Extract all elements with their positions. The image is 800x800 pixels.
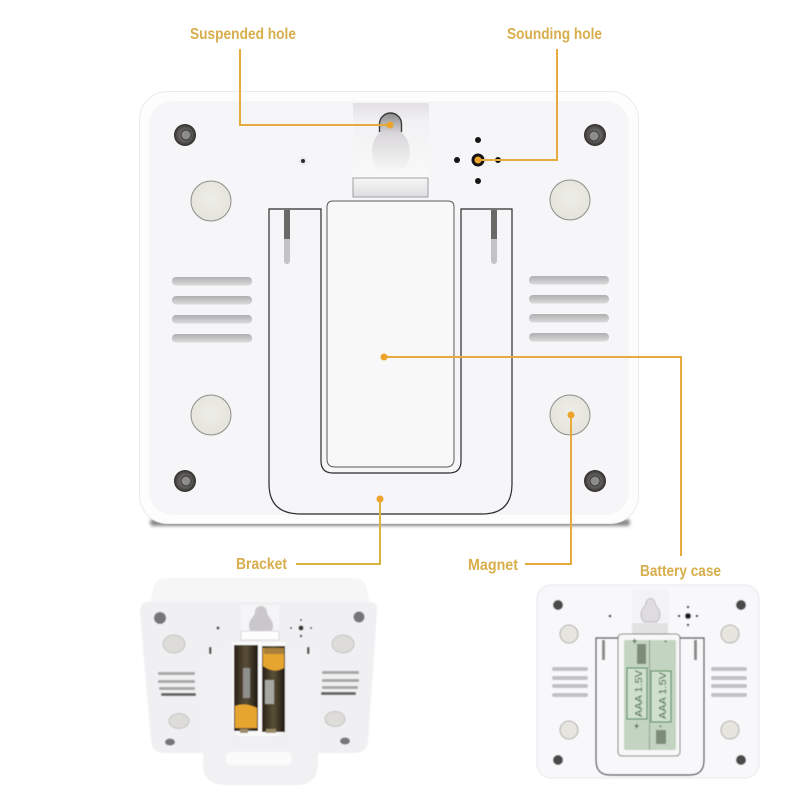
- dot: sounding hole: [474, 156, 482, 164]
- magnets: [560, 625, 739, 739]
- small hole: [609, 615, 611, 617]
- hinge tab: [353, 178, 428, 197]
- hanging recess with keyhole: [353, 103, 429, 179]
- bracket slot: right: [491, 210, 497, 264]
- device body: [537, 585, 759, 778]
- recess around hanging hole: [241, 605, 279, 631]
- vents: [158, 671, 359, 696]
- screws: [154, 612, 364, 746]
- bracket outline: [269, 209, 512, 514]
- magnet: bottom right: [550, 395, 590, 435]
- battery label: left: [627, 668, 647, 719]
- hanging hole: [249, 606, 273, 633]
- battery polarity marks: -: [664, 636, 667, 646]
- tilted device face: [140, 602, 377, 753]
- dot: suspended hole: [386, 122, 394, 128]
- leader line: magnet: [525, 415, 571, 564]
- battery label: left: AAA 1.5V: [633, 670, 645, 717]
- hinge: [241, 631, 279, 640]
- dot: magnet: [568, 412, 574, 418]
- leader line: sounding hole: [478, 49, 557, 160]
- vents: [552, 667, 747, 697]
- device inner face: [149, 101, 629, 515]
- screw: top left: [174, 124, 196, 146]
- screw: bottom right: [584, 470, 606, 492]
- battery polarity marks: -: [659, 721, 662, 731]
- battery polarity marks: +: [632, 636, 637, 646]
- battery contacts: [240, 729, 276, 733]
- battery: right: [262, 646, 285, 732]
- photo: tilted device with batteries: [140, 578, 377, 785]
- label: sounding hole: Sounding hole: [507, 26, 602, 43]
- photo: device with open battery case: [537, 585, 759, 778]
- callout: bracket: [236, 496, 384, 573]
- keyhole: [641, 598, 660, 622]
- magnet: top left: [191, 181, 231, 221]
- small reset hole: [298, 156, 308, 166]
- bracket opening: [226, 752, 292, 765]
- callout: magnet: [468, 412, 574, 574]
- callout: suspended hole: [190, 26, 394, 128]
- battery polarity marks: +: [634, 721, 639, 731]
- label: battery case: Battery case: [640, 563, 721, 580]
- leader line: bracket: [296, 499, 380, 564]
- label: bracket: Bracket: [236, 556, 288, 573]
- speaker holes: [454, 137, 501, 184]
- dot: battery case: [380, 354, 388, 360]
- bracket: [203, 646, 318, 785]
- label: suspended hole: Suspended hole: [190, 26, 296, 43]
- dot: bracket: [376, 496, 384, 502]
- bracket slots: [209, 647, 310, 654]
- battery label: right: [651, 671, 671, 722]
- leader line: battery case: [384, 357, 681, 556]
- battery case green interior: [624, 640, 676, 750]
- vents: right: [529, 276, 609, 342]
- device shadow: [150, 519, 630, 526]
- contact springs: [637, 644, 666, 744]
- bracket: [596, 638, 704, 775]
- callout: sounding hole: [474, 26, 602, 164]
- bracket slots: [602, 640, 697, 660]
- vents: left: [172, 277, 252, 342]
- callout: battery case: [380, 354, 721, 580]
- battery label: right: AAA 1.5V: [657, 672, 669, 719]
- battery divider: [649, 640, 650, 750]
- recess: [632, 590, 669, 622]
- device body: [140, 92, 638, 524]
- label: magnet: Magnet: [468, 557, 519, 574]
- screw: bottom left: [174, 470, 196, 492]
- main device: back view: [140, 92, 638, 526]
- screws: [553, 600, 746, 765]
- battery bay: [232, 642, 285, 736]
- screw: top right: [584, 124, 606, 146]
- battery case frame: [618, 634, 680, 756]
- magnets: [163, 635, 354, 728]
- battery polarity marks: [632, 636, 667, 731]
- magnet: top right: [550, 180, 590, 220]
- speaker holes: [290, 619, 312, 637]
- speaker holes: [678, 606, 698, 626]
- leader line: suspended hole: [240, 49, 390, 125]
- hinge: [632, 623, 668, 634]
- tilted device top edge: [150, 578, 370, 602]
- small hole: [216, 626, 220, 630]
- bracket slot: left: [284, 210, 290, 264]
- magnet: bottom left: [191, 395, 231, 435]
- battery: left: [234, 645, 258, 731]
- battery cover: [327, 201, 454, 467]
